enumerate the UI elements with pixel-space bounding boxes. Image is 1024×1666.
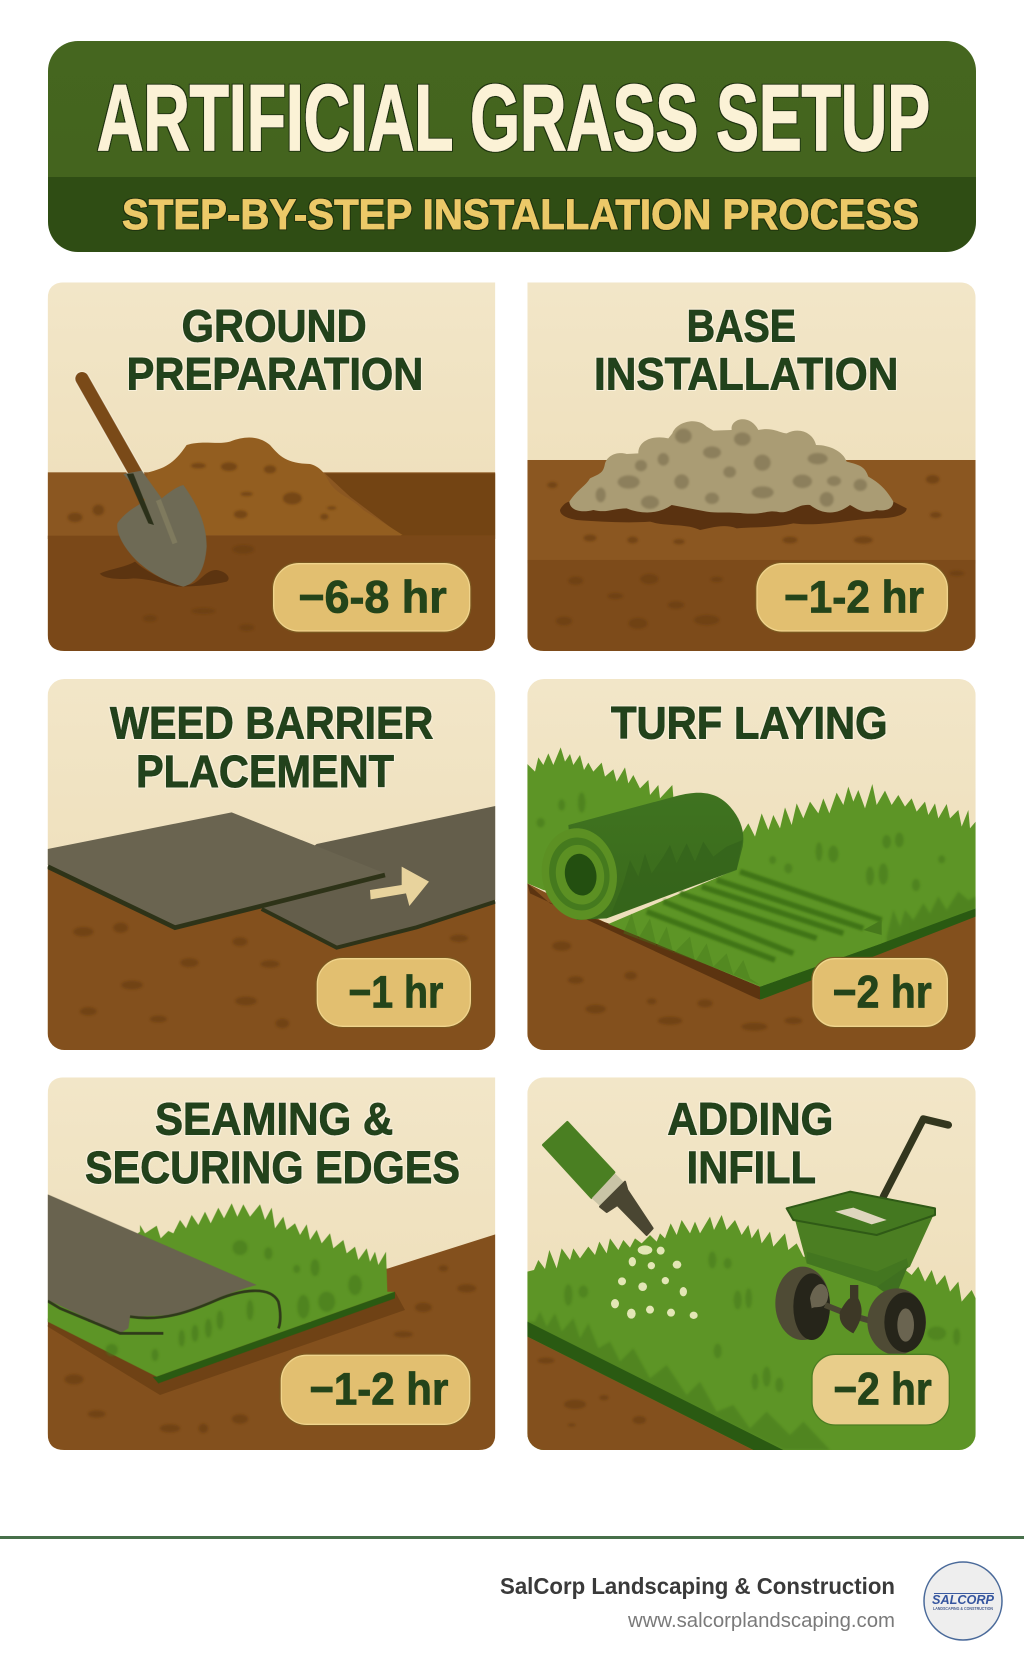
icon: infill pellets	[611, 1245, 698, 1319]
heading: INFILL	[687, 1142, 816, 1193]
scene: gravel pile	[527, 282, 976, 651]
icon: right barrier sheet	[243, 806, 495, 948]
time badge	[812, 1354, 949, 1425]
footer divider	[0, 1536, 1024, 1539]
time badge	[280, 1354, 471, 1426]
heading	[127, 300, 423, 399]
panel: base installation	[527, 282, 976, 651]
time badge: −2 hr	[833, 967, 932, 1018]
panel: ground preparation	[48, 282, 495, 651]
scene: turf roll	[527, 679, 976, 1050]
icon: turf roll	[535, 793, 743, 926]
icon: broadcast spreader	[775, 1119, 948, 1355]
time badge: −2 hr	[833, 1363, 932, 1414]
time badge	[812, 957, 949, 1028]
heading: INSTALLATION	[594, 348, 898, 399]
scene: barrier sheets on soil	[48, 679, 495, 1050]
panel: adding infill	[527, 1077, 976, 1450]
heading: PREPARATION	[127, 348, 423, 399]
time badge	[272, 562, 471, 632]
heading: TURF LAYING	[611, 698, 888, 749]
heading: GROUND	[182, 300, 367, 351]
soil corner	[527, 1322, 783, 1450]
logo badge: SALCORP	[932, 1592, 994, 1607]
icon: back-left grass	[527, 747, 673, 903]
scene: soil mound and shovel	[48, 282, 495, 651]
icon: folded barrier sheet	[48, 1194, 280, 1333]
heading	[85, 1094, 460, 1193]
time badge	[316, 957, 472, 1028]
shadow under gravel	[560, 502, 907, 530]
scene: turf with barrier fold	[48, 1077, 495, 1450]
panel: weed barrier placement	[48, 679, 495, 1050]
heading: BASE	[687, 300, 796, 351]
heading: ADDING	[667, 1094, 833, 1145]
icon: gravel pile	[569, 419, 893, 514]
icon: unrolled turf strip	[608, 869, 882, 987]
subtitle: STEP-BY-STEP INSTALLATION PROCESS	[122, 191, 919, 239]
heading: PLACEMENT	[136, 746, 394, 797]
time badge	[756, 562, 949, 632]
heading	[667, 1094, 833, 1193]
heading	[594, 300, 898, 399]
logo badge: LANDSCAPING & CONSTRUCTION	[933, 1606, 993, 1611]
heading: WEED BARRIER	[110, 698, 433, 749]
icon: grass lawn	[527, 1215, 976, 1450]
heading: SEAMING &	[155, 1094, 393, 1145]
icon: left barrier sheet	[48, 812, 385, 928]
footer website: www.salcorplandscaping.com	[627, 1610, 895, 1632]
icon: applicator bottle	[543, 1122, 653, 1235]
time badge: −6-8 hr	[298, 571, 447, 622]
time badge: −1 hr	[348, 967, 443, 1018]
icon: shovel	[82, 379, 207, 587]
icon: right grass	[710, 784, 976, 987]
panel: seaming and securing edges	[48, 1077, 495, 1450]
logo badge	[924, 1562, 1002, 1640]
icon: dug hole	[100, 562, 229, 587]
soil edge under turf	[527, 883, 760, 1000]
time badge: −1-2 hr	[784, 571, 924, 622]
scene: infill spreader	[527, 1077, 976, 1450]
panel: turf laying	[527, 679, 976, 1050]
title banner	[48, 41, 976, 252]
heading	[110, 698, 433, 797]
footer company name: SalCorp Landscaping & Construction	[500, 1573, 895, 1599]
time badge: −1-2 hr	[309, 1363, 448, 1414]
icon: turf section	[48, 1203, 395, 1383]
heading: SECURING EDGES	[85, 1142, 460, 1193]
icon: arrow	[370, 867, 429, 906]
